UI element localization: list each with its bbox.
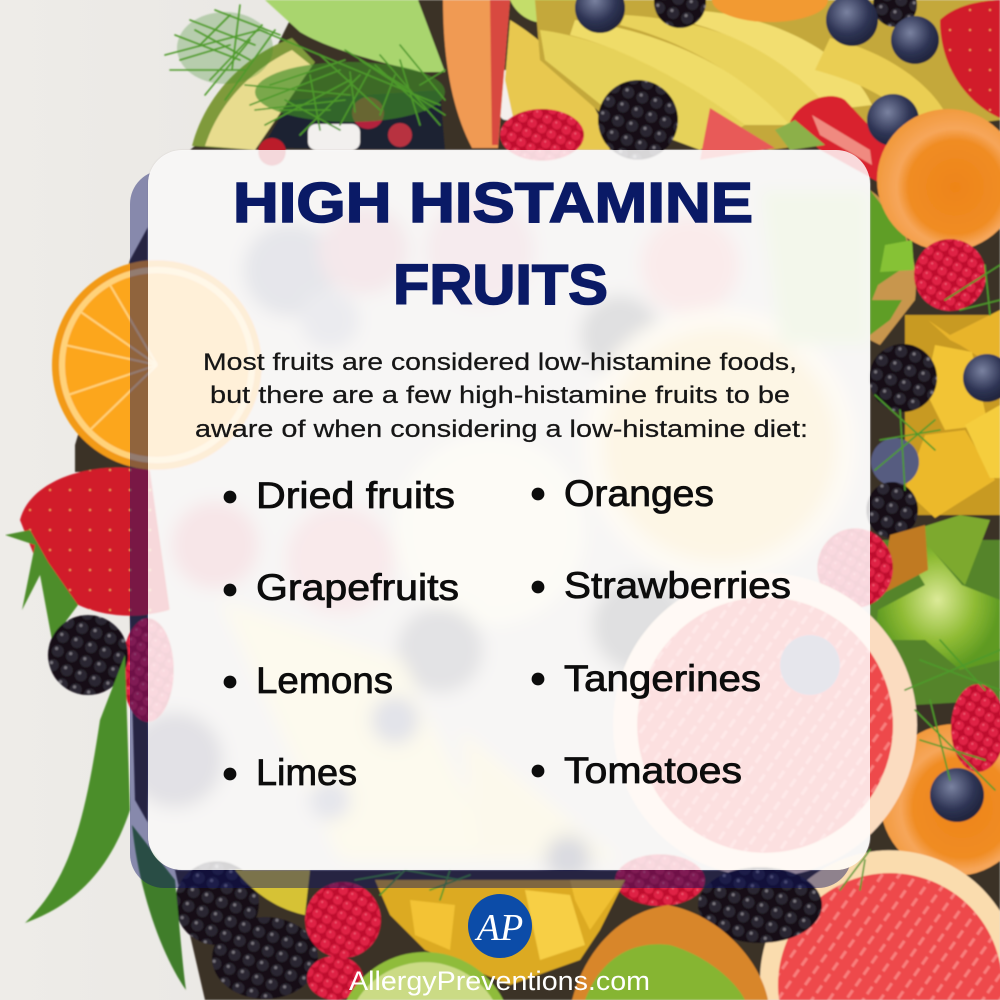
- lime bottom: [347, 952, 503, 1000]
- icon: AP logo: [468, 894, 532, 958]
- list: left column: Grapefruits: [256, 567, 459, 608]
- blackberry right: [869, 344, 937, 412]
- raspberry lower right: [951, 684, 1000, 772]
- website footer: AllergyPreventions.com: [349, 966, 650, 996]
- icon: AP logo: AP: [474, 907, 523, 949]
- blueberries right: [871, 354, 1000, 486]
- blueberries top: [575, 0, 939, 146]
- raspberries left panel edge: [122, 618, 174, 722]
- blackberries top: [598, 0, 917, 160]
- list: left column: Lemons: [256, 660, 393, 701]
- intro text: [195, 349, 808, 443]
- intro text: but there are a few high-histamine fruits to be: [210, 382, 790, 409]
- strawberry top right: [940, 0, 1000, 118]
- title: HIGH HISTAMINE: [233, 171, 753, 235]
- intro text: aware of when considering a low-histamine diet:: [195, 416, 808, 443]
- apricot lower right: [880, 724, 1000, 876]
- lime top: [507, 0, 583, 23]
- grapefruit slice: [443, 0, 510, 148]
- kiwi right: [870, 515, 1000, 705]
- list: right column: Tangerines: [564, 658, 761, 699]
- panel shadow: navy offset card: [130, 170, 852, 888]
- blackberry left: [48, 615, 128, 695]
- raspberry top: [500, 109, 584, 161]
- orange slice left: [52, 260, 262, 470]
- grapefruit large: [613, 573, 917, 877]
- apricot top: [712, 0, 828, 22]
- faded fruits behind card: [146, 148, 872, 872]
- list: right column: Tomatoes: [564, 750, 742, 791]
- apricot right: [877, 109, 1000, 251]
- title: [233, 171, 753, 317]
- list: right column: [532, 473, 791, 791]
- list: left column: Dried fruits: [256, 475, 455, 516]
- list: right column: Oranges: [564, 473, 714, 514]
- panel: white translucent card: [148, 150, 870, 870]
- melon wedge: [265, 0, 445, 72]
- mango cubes bottom: [375, 880, 625, 985]
- raspberry mid right: [817, 528, 893, 608]
- title: FRUITS: [393, 253, 608, 317]
- banana bottom: [235, 870, 310, 915]
- list: left column: Limes: [256, 752, 357, 793]
- banana slices: [535, 0, 1000, 150]
- mixed fruit bits: [258, 70, 532, 166]
- intro text: Most fruits are considered low-histamine foods,: [203, 349, 797, 376]
- strawberry slice: [700, 108, 775, 160]
- leaf bottom: [132, 825, 186, 990]
- blueberry lower right: [930, 768, 984, 822]
- raspberries bottom: [305, 854, 705, 1000]
- list: right column: Strawberries: [564, 565, 791, 606]
- list: left column: [224, 475, 459, 793]
- strawberry top: [775, 96, 892, 182]
- kiwi right top: [870, 190, 916, 345]
- dill foliage mass: [177, 12, 445, 122]
- blackberry right lower: [866, 482, 918, 538]
- kiwi bottom: [572, 905, 768, 1000]
- blackberries bottom: [175, 861, 822, 999]
- leaf long: [25, 655, 130, 923]
- raspberry right: [914, 239, 986, 311]
- dill sprigs: [165, 5, 1000, 900]
- grapefruit bottom right: [760, 850, 1000, 1000]
- mango cubes right: [905, 310, 1000, 518]
- strawberry left: [5, 467, 170, 640]
- pineapple wedge: [192, 38, 315, 150]
- pineapple piece: [505, 20, 610, 150]
